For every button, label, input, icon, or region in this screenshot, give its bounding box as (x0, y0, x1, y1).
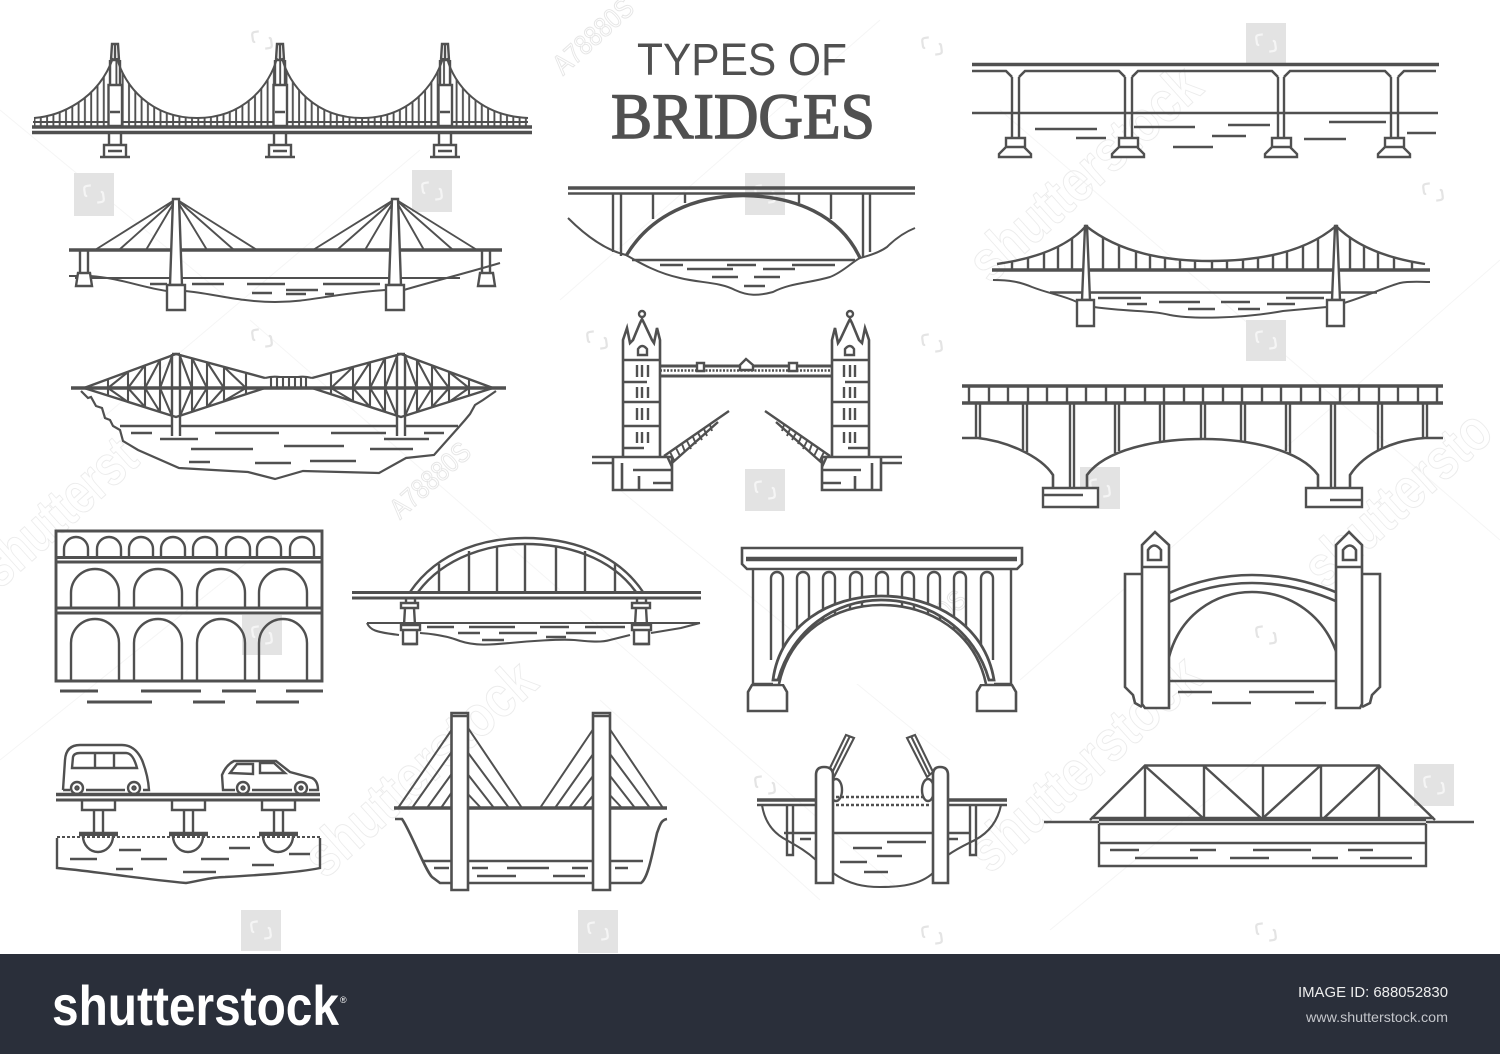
pillars (1125, 532, 1169, 708)
towers (1082, 226, 1340, 300)
deck (972, 63, 1439, 66)
bridge: roman aqueduct (56, 531, 323, 702)
arch (1169, 592, 1338, 657)
bands (56, 558, 322, 613)
image id: IMAGE ID: 688052830 (1298, 984, 1448, 1001)
cable (997, 226, 1425, 264)
water (632, 259, 855, 261)
water (1169, 680, 1338, 682)
title line: types of: TYPES OF (637, 34, 847, 85)
water and bank (367, 623, 700, 645)
towers (452, 713, 610, 890)
columns (976, 403, 1427, 488)
bridge: gothic arch with spired pillars (1125, 532, 1380, 708)
cables (95, 199, 477, 250)
footer bar (0, 954, 1500, 1054)
cables (34, 58, 528, 118)
bridge: girder viaduct on piers (972, 64, 1439, 157)
bridge: cantilever truss (71, 354, 506, 479)
watermark layer: shutterstock (290, 647, 550, 890)
walls and feet (753, 569, 1011, 684)
logo: shutterstock (52, 974, 340, 1037)
truss left (84, 354, 265, 436)
footings (1043, 488, 1362, 507)
base left and bascule (592, 411, 729, 490)
bridge: cable-stayed with fan cables (69, 199, 502, 310)
deck (71, 386, 506, 390)
arch (410, 538, 643, 592)
water dashes (60, 691, 323, 702)
lower arches (71, 619, 307, 681)
ground (568, 218, 915, 295)
uprights (969, 386, 1437, 403)
rails (962, 386, 1443, 403)
bridge: long arch viaduct (962, 386, 1443, 507)
water (120, 425, 458, 427)
car (222, 761, 318, 794)
bridge: three-tower suspension (32, 44, 532, 157)
bridge: spandrel arch over gorge (568, 188, 915, 295)
hangers (439, 544, 615, 592)
site url: www.shutterstock.com (1305, 1009, 1448, 1025)
water (57, 836, 320, 838)
water (1110, 850, 1412, 858)
deck (568, 186, 915, 190)
bridge: pontoon with vehicles (56, 745, 320, 883)
tower right (832, 311, 869, 457)
bridge: tied arch (352, 538, 701, 645)
banks (81, 391, 496, 479)
towers and piers (170, 199, 401, 285)
piers (401, 599, 420, 644)
bridge: tower bridge (592, 311, 902, 490)
water (784, 832, 970, 834)
base right and bascule (765, 411, 902, 490)
ground line (1044, 821, 1474, 823)
title line: bridges: BRIDGES (611, 81, 875, 153)
towers (100, 44, 460, 157)
deck (56, 793, 320, 796)
middle arches (71, 569, 307, 607)
deck (992, 268, 1430, 272)
water (972, 112, 1438, 114)
watermark layer: A78880S (383, 436, 477, 524)
arches (962, 438, 1443, 488)
deck (394, 806, 667, 810)
tower left (623, 311, 660, 457)
piers (82, 801, 295, 832)
title (611, 34, 875, 153)
truss (1090, 766, 1435, 820)
bridge: tall cable-stayed (394, 713, 667, 890)
deck (352, 592, 701, 598)
bridge: stone arch with fluted spandrels (742, 548, 1022, 711)
hangers (1010, 238, 1414, 268)
water and banks (69, 263, 500, 302)
truss right (312, 354, 493, 436)
outline (56, 531, 322, 681)
arch rings (773, 596, 994, 680)
watermark layer: A78880S (879, 584, 973, 672)
basin (395, 819, 667, 883)
piers (999, 77, 1410, 157)
leaves (828, 735, 933, 777)
cornice (742, 548, 1022, 569)
arch (626, 196, 860, 258)
flutes (771, 572, 993, 660)
watermark layer: shutterstock (955, 642, 1215, 885)
small arches (64, 537, 314, 556)
van (63, 745, 149, 794)
walkway (660, 366, 833, 376)
deck ribs (1169, 575, 1338, 602)
bridge: two-tower suspension (992, 225, 1430, 326)
water (422, 860, 643, 862)
watermark layer: shutterstock (955, 52, 1215, 295)
centre span (265, 377, 312, 388)
columns (613, 193, 870, 257)
water and banks (1050, 291, 1377, 294)
deck (757, 798, 1007, 802)
deck (69, 248, 502, 252)
bridge: drawbridge (757, 735, 1007, 887)
hangers (34, 58, 528, 127)
deck and box (1099, 820, 1426, 824)
registered mark: ® (340, 995, 347, 1005)
small columns (787, 805, 976, 855)
cables (398, 725, 663, 808)
banks (762, 805, 1001, 887)
bridge: truss on abutments (1044, 766, 1474, 866)
towers (816, 767, 948, 883)
